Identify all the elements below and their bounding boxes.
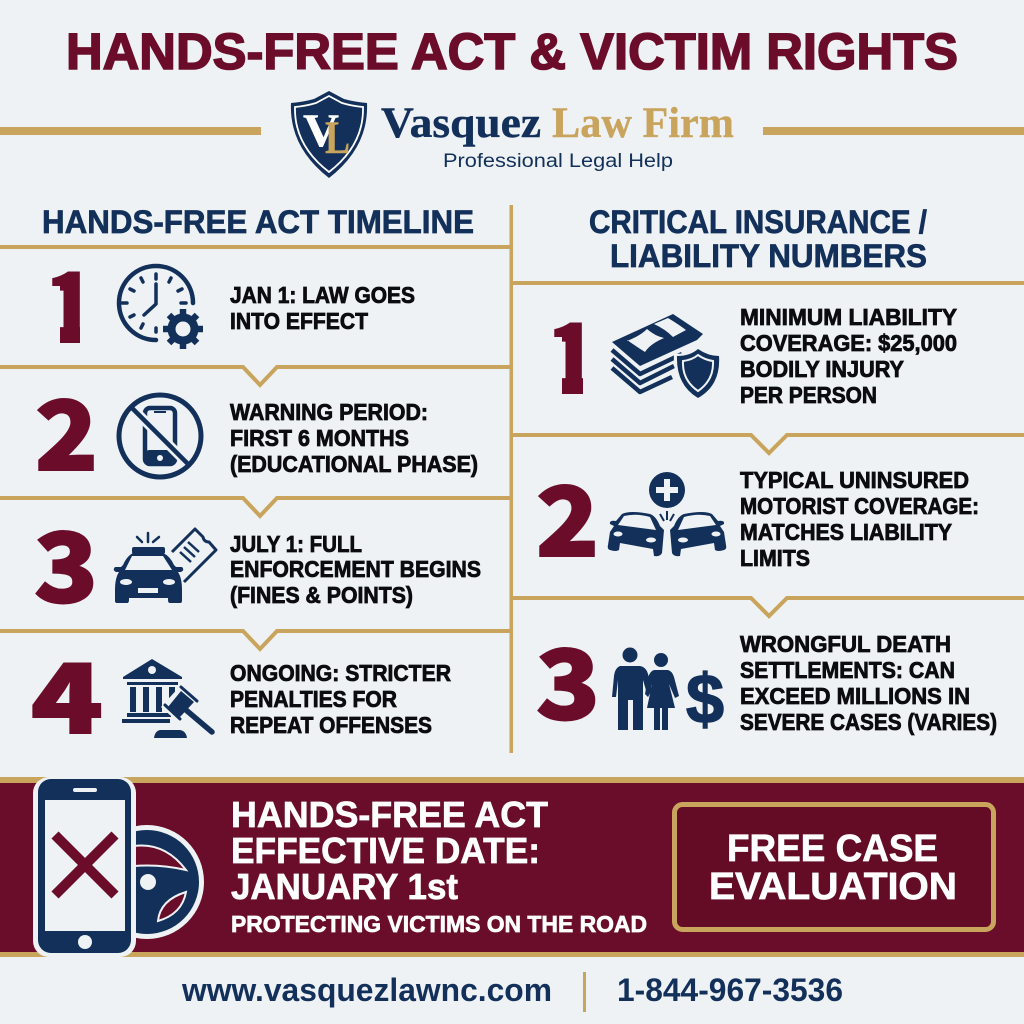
step text 2	[230, 399, 478, 477]
step text 2: MOTORIST COVERAGE:	[740, 493, 979, 519]
step text 1: JAN 1: LAW GOES	[230, 282, 415, 308]
step text 2: LIMITS	[740, 545, 810, 571]
icon: steering wheel	[90, 825, 204, 939]
step text 3	[230, 531, 481, 608]
step text 2	[740, 467, 979, 571]
step text 4: ONGOING: STRICTER	[230, 660, 451, 686]
icon: police car and ticket	[114, 529, 216, 603]
number 4: 4	[31, 622, 103, 761]
step text 1: MINIMUM LIABILITY	[740, 304, 957, 330]
icon: law firm shield	[291, 91, 367, 178]
banner text	[231, 794, 647, 937]
icon: money stack and shield	[612, 314, 722, 401]
step text 3: WRONGFUL DEATH	[740, 631, 951, 657]
step text 3: (FINES & POINTS)	[230, 582, 413, 608]
step text 3: SEVERE CASES (VARIES)	[740, 709, 997, 735]
step text 1: PER PERSON	[740, 382, 877, 408]
icon: family and dollar sign: $	[686, 660, 724, 738]
call to action button: FREE CASE	[727, 828, 938, 870]
heading: insurance numbers	[589, 204, 927, 274]
panel: hands-free act timeline	[31, 204, 481, 761]
icon: law firm shield: L	[325, 112, 350, 164]
step text 3: JULY 1: FULL	[230, 531, 362, 557]
step text 4	[230, 660, 451, 738]
panel: critical insurance and liability numbers	[536, 204, 997, 747]
step text 1: BODILY INJURY	[740, 356, 904, 382]
icon: law firm shield: V	[303, 105, 339, 157]
title: HANDS-FREE ACT & VICTIM RIGHTS	[66, 23, 958, 80]
heading: timeline: HANDS-FREE ACT TIMELINE	[42, 204, 474, 240]
heading: insurance numbers: CRITICAL INSURANCE /	[589, 204, 927, 240]
banner text: PROTECTING VICTIMS ON THE ROAD	[231, 911, 647, 937]
icon: phone with x	[33, 777, 136, 957]
icon: clock and gear	[119, 266, 206, 352]
banner text: HANDS-FREE ACT	[231, 794, 548, 835]
number 3: 3	[536, 608, 600, 747]
step text 2: (EDUCATIONAL PHASE)	[230, 451, 478, 477]
call to action button: EVALUATION	[709, 866, 957, 908]
step text 1: COVERAGE: $25,000	[740, 330, 957, 356]
banner	[0, 777, 1024, 957]
step text 3: EXCEED MILLIONS IN	[740, 683, 970, 709]
step text 2: MATCHES LIABILITY	[740, 519, 952, 545]
tagline: Professional Legal Help	[443, 151, 673, 172]
number 1: 1	[547, 282, 597, 421]
banner text: JANUARY 1st	[231, 866, 458, 907]
number 1: 1	[45, 231, 95, 370]
firm name accent: Law Firm	[552, 100, 734, 147]
website: www.vasquezlawnc.com	[181, 972, 552, 1008]
footer contact	[181, 972, 843, 1012]
number 3: 3	[34, 491, 98, 630]
step text 2: TYPICAL UNINSURED	[740, 467, 969, 493]
icon: no phone	[119, 395, 201, 477]
logo header	[0, 91, 1024, 178]
number 2: 2	[536, 445, 599, 584]
banner text: EFFECTIVE DATE:	[231, 830, 540, 871]
heading: insurance numbers: LIABILITY NUMBERS	[610, 238, 927, 274]
icon: family and dollar sign	[612, 648, 724, 738]
step text 3: SETTLEMENTS: CAN	[740, 657, 955, 683]
step text 2: WARNING PERIOD:	[230, 399, 428, 425]
step text 1	[740, 304, 957, 408]
icon: car crash with medical cross	[608, 472, 726, 556]
phone number: 1-844-967-3536	[617, 972, 843, 1008]
column divider and section rules	[0, 205, 1024, 753]
number 2: 2	[35, 359, 98, 498]
step text 2: FIRST 6 MONTHS	[230, 425, 409, 451]
step text 4: REPEAT OFFENSES	[230, 712, 432, 738]
step text 3: ENFORCEMENT BEGINS	[230, 556, 481, 582]
step text 1	[230, 282, 415, 334]
icon: courthouse and gavel	[122, 659, 212, 738]
firm name: Vasquez	[381, 100, 541, 147]
call to action button	[674, 804, 994, 930]
step text 4: PENALTIES FOR	[230, 686, 397, 712]
step text 3	[740, 631, 997, 735]
step text 1: INTO EFFECT	[230, 308, 368, 334]
